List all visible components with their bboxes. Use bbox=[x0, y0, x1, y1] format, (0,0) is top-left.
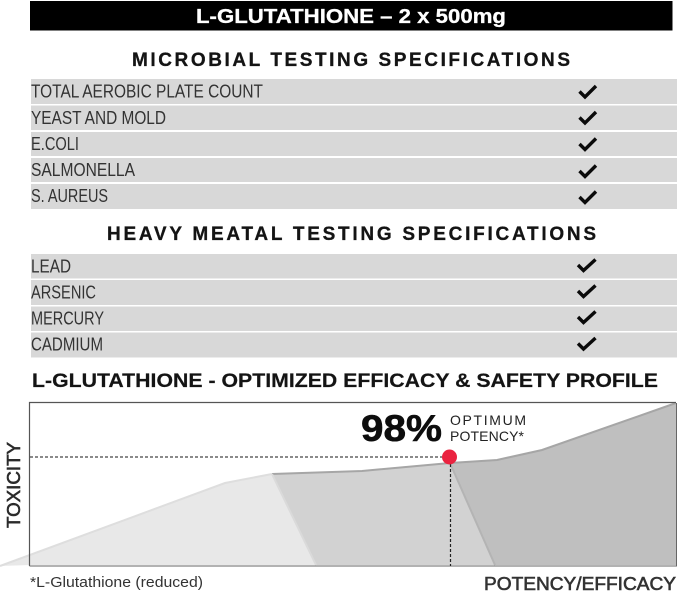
chart frame bbox=[30, 402, 676, 566]
title banner: L-GLUTATHIONE – 2 x 500mg bbox=[196, 6, 506, 28]
table: microbial testing specifications: SALMONELLA bbox=[31, 159, 136, 180]
table: microbial testing specifications bbox=[31, 79, 677, 209]
y axis label: TOXICITY bbox=[4, 442, 24, 528]
chart: efficacy vs toxicity bbox=[0, 402, 676, 566]
callout: 98% optimum potency: POTENCY* bbox=[450, 428, 525, 444]
guide lines bbox=[30, 457, 450, 566]
title banner bbox=[30, 1, 672, 30]
table: microbial testing specifications: E.COLI bbox=[31, 133, 79, 154]
callout: 98% optimum potency bbox=[361, 408, 526, 449]
area: low potency zone bbox=[0, 474, 316, 566]
heading: efficacy and safety profile: L-GLUTATHIONE - OPTIMIZED EFFICACY & SAFETY PROFILE bbox=[32, 370, 658, 392]
table: heavy metal testing specifications: CADMIUM bbox=[31, 334, 103, 354]
table: microbial testing specifications: YEAST AND MOLD bbox=[31, 107, 166, 128]
heading: microbial testing: MICROBIAL TESTING SPECIFICATIONS bbox=[132, 50, 570, 71]
table: heavy metal testing specifications: ARSENIC bbox=[31, 282, 96, 302]
table: heavy metal testing specifications: LEAD bbox=[31, 256, 71, 276]
table: heavy metal testing specifications bbox=[31, 254, 677, 358]
table: microbial testing specifications: S. AUREUS bbox=[31, 185, 108, 206]
callout: 98% optimum potency: OPTIMUM bbox=[450, 412, 526, 428]
marker: optimum point bbox=[442, 450, 457, 464]
table: heavy metal testing specifications: MERCURY bbox=[31, 308, 104, 328]
footnote: *L-Glutathione (reduced) bbox=[30, 574, 203, 591]
heading: heavy metal testing: HEAVY MEATAL TESTING SPECIFICATIONS bbox=[107, 224, 596, 245]
table: microbial testing specifications: TOTAL AEROBIC PLATE COUNT bbox=[31, 80, 263, 102]
callout: 98% optimum potency: 98% bbox=[361, 408, 442, 449]
area: mid potency zone bbox=[272, 463, 495, 565]
area: high potency zone bbox=[450, 403, 676, 565]
